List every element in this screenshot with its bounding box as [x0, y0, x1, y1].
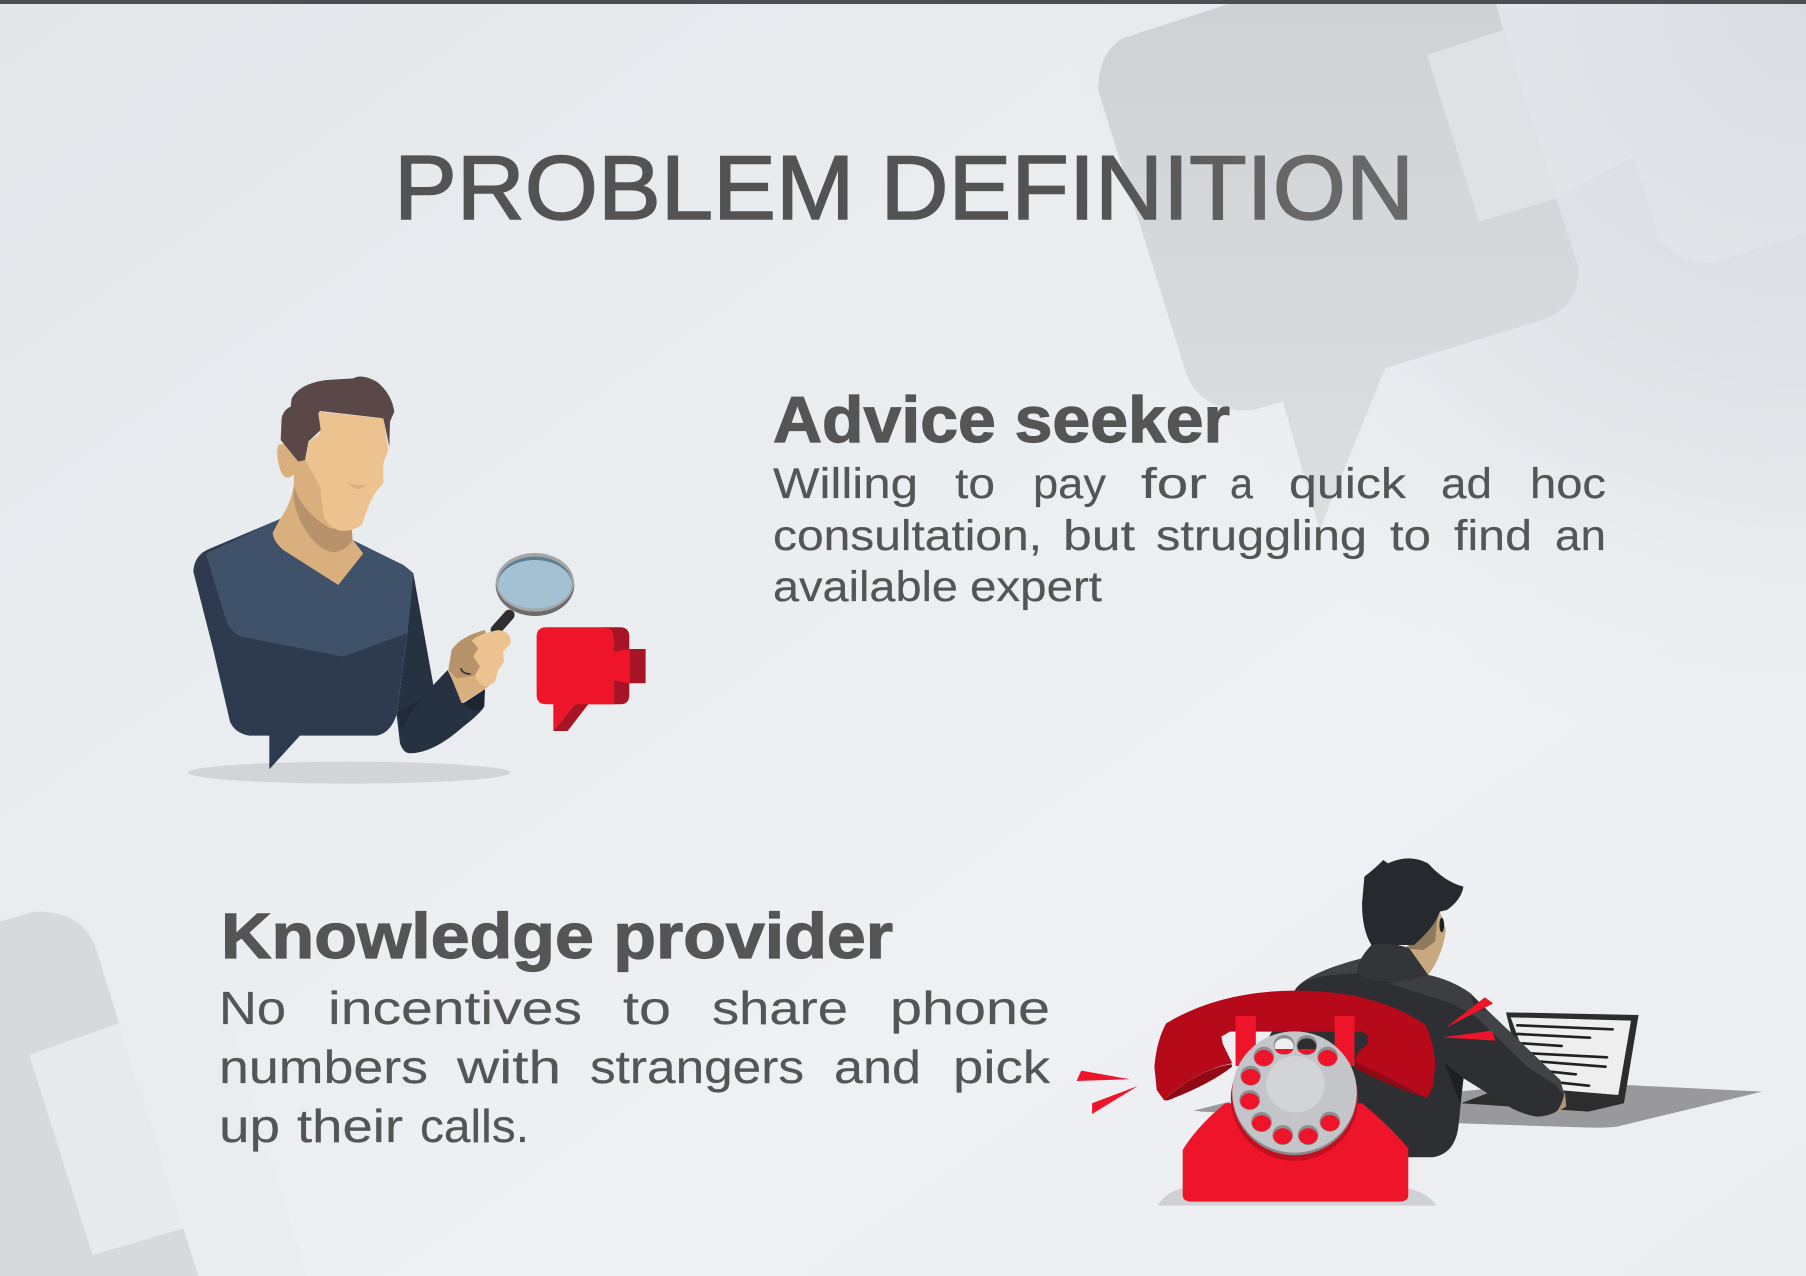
text: knowledge provider description: pick [953, 1041, 1051, 1093]
collar [1357, 944, 1428, 982]
arm fold [398, 700, 422, 730]
sleeve shadow [1445, 1063, 1463, 1103]
hair [281, 376, 394, 462]
ear [277, 444, 298, 477]
heading: knowledge provider: Knowledge provider [221, 900, 893, 972]
text: knowledge provider description: calls. [420, 1100, 529, 1152]
illustration: knowledge provider with ringing phone [1077, 858, 1762, 1206]
text: knowledge provider description [219, 982, 1051, 1152]
ring sparks [1077, 997, 1496, 1114]
illustration: advice seeker man with magnifier [188, 376, 646, 784]
dial holes [1239, 1035, 1340, 1145]
arm [397, 573, 485, 753]
text: advice seeker description: expert [970, 563, 1102, 611]
phone base [1183, 1103, 1408, 1202]
text: advice seeker description: ad [1441, 460, 1492, 508]
text: knowledge provider description: numbers [219, 1041, 428, 1093]
text: advice seeker description: hoc [1530, 460, 1606, 508]
face [305, 412, 388, 531]
text: advice seeker description: pay [1033, 460, 1107, 508]
text: advice seeker description: but [1063, 512, 1135, 560]
text: advice seeker description: struggling [1156, 512, 1367, 560]
hand [448, 660, 495, 703]
hair [1362, 858, 1463, 945]
text: knowledge provider description: with [456, 1041, 561, 1093]
text: advice seeker description: consultation, [773, 512, 1042, 560]
text: advice seeker description: to [955, 460, 995, 508]
text: knowledge provider description: up [219, 1100, 280, 1152]
rotary dial [1231, 1036, 1358, 1161]
handset underside [1164, 1064, 1232, 1101]
cuff [463, 689, 485, 711]
text: advice seeker description: available [773, 563, 958, 611]
neck shadow [294, 487, 353, 552]
text: advice seeker description: for [1141, 460, 1207, 508]
ear [1439, 918, 1444, 932]
text: knowledge provider description: their [297, 1100, 403, 1152]
mouth [347, 483, 367, 489]
sweater chest highlight [206, 519, 413, 657]
title: PROBLEM DEFINITION [394, 138, 1414, 239]
text: advice seeker description: an [1555, 512, 1606, 560]
phone base shadow [1158, 1188, 1437, 1206]
text: knowledge provider description: No [219, 982, 286, 1034]
text: knowledge provider description: and [834, 1041, 921, 1093]
background icon: thumbs-up speech bubble bottom left [0, 853, 307, 1276]
magnifier ring [496, 554, 574, 616]
background icon: thumbs-down speech bubble top right [1098, 4, 1806, 530]
top bar [0, 0, 1806, 4]
text: knowledge provider description: strangers [590, 1041, 804, 1093]
jacket [1249, 944, 1565, 1157]
text: advice seeker description: Willing [773, 460, 918, 508]
magnifier lens [498, 557, 572, 609]
heading: advice seeker: Advice seeker [773, 383, 1230, 456]
desk shadow [1194, 1085, 1762, 1128]
ground shadow [188, 762, 511, 784]
text: knowledge provider description: to [623, 982, 671, 1034]
text: knowledge provider description: share [712, 982, 848, 1034]
text: advice seeker description [773, 460, 1606, 611]
jacket highlights [1296, 958, 1362, 988]
sweater body shaped as speech bubble [193, 519, 413, 769]
neck and face [1404, 912, 1446, 975]
text: advice seeker description: find [1454, 512, 1532, 560]
text: knowledge provider description: incentives [328, 982, 582, 1034]
text: advice seeker description: to [1390, 512, 1431, 560]
cradle prongs [1236, 1016, 1256, 1066]
neck [273, 447, 363, 585]
magnifier handle [496, 615, 509, 630]
handset [1154, 991, 1435, 1100]
text: advice seeker description: a [1230, 460, 1253, 508]
text: knowledge provider description: phone [890, 982, 1050, 1034]
text: advice seeker description: quick [1289, 460, 1407, 508]
wrist [1550, 1092, 1566, 1116]
screen text lines [1518, 1025, 1612, 1086]
laptop screen [1511, 1017, 1631, 1095]
thumbs-down bubble [553, 627, 646, 731]
laptop [1461, 1012, 1639, 1112]
